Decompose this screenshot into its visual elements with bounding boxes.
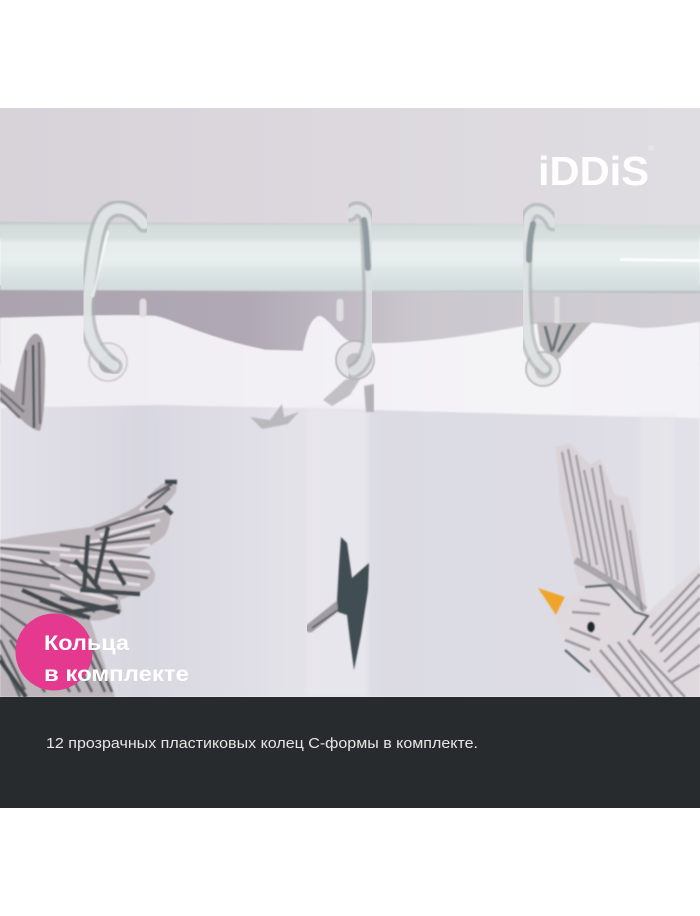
photo: curtain on rod [0, 108, 700, 697]
head and body [555, 565, 700, 697]
rod highlight [620, 258, 700, 262]
bird wing at left edge [0, 334, 45, 431]
logo: IDDIS: iDDiS [538, 148, 649, 194]
curtain folds [338, 411, 365, 694]
pink circle badge [16, 614, 92, 690]
ring two [350, 209, 371, 371]
wing feather strokes [562, 449, 642, 610]
wall shadow beneath rod [0, 285, 700, 365]
plastic hook stubs [143, 298, 557, 322]
curtain fabric lower panel [0, 315, 700, 697]
beak [538, 588, 565, 615]
body feather strokes [565, 574, 700, 697]
large bird at left [0, 480, 177, 697]
wing and body [0, 480, 177, 697]
star arm [310, 604, 340, 628]
ring three eyelet [526, 352, 560, 386]
eye [587, 622, 595, 632]
ring three [524, 210, 553, 369]
small faded star print [250, 404, 299, 429]
raised wing [556, 443, 647, 617]
wall [0, 108, 700, 238]
infographic canvas [0, 108, 700, 808]
feather strokes [0, 484, 172, 697]
dark caption band [0, 697, 700, 808]
faded print behind fold [323, 378, 360, 406]
registered mark: ® [648, 144, 654, 153]
badge heading: Кольца [44, 631, 130, 655]
badge heading: в комплекте [44, 662, 189, 686]
star core [337, 537, 369, 670]
curtain hem [0, 315, 700, 418]
feather light strokes [0, 490, 168, 600]
bird at right [538, 443, 700, 697]
ring two eyelet [336, 341, 374, 379]
star print [310, 537, 369, 670]
ring one eyelet [89, 343, 127, 381]
curtain rod [0, 222, 700, 293]
ring one [87, 209, 144, 366]
print behind third ring [537, 322, 592, 362]
badge heading [46, 636, 188, 681]
caption text: 12 прозрачных пластиковых колец С-формы в комплекте. [46, 736, 478, 752]
